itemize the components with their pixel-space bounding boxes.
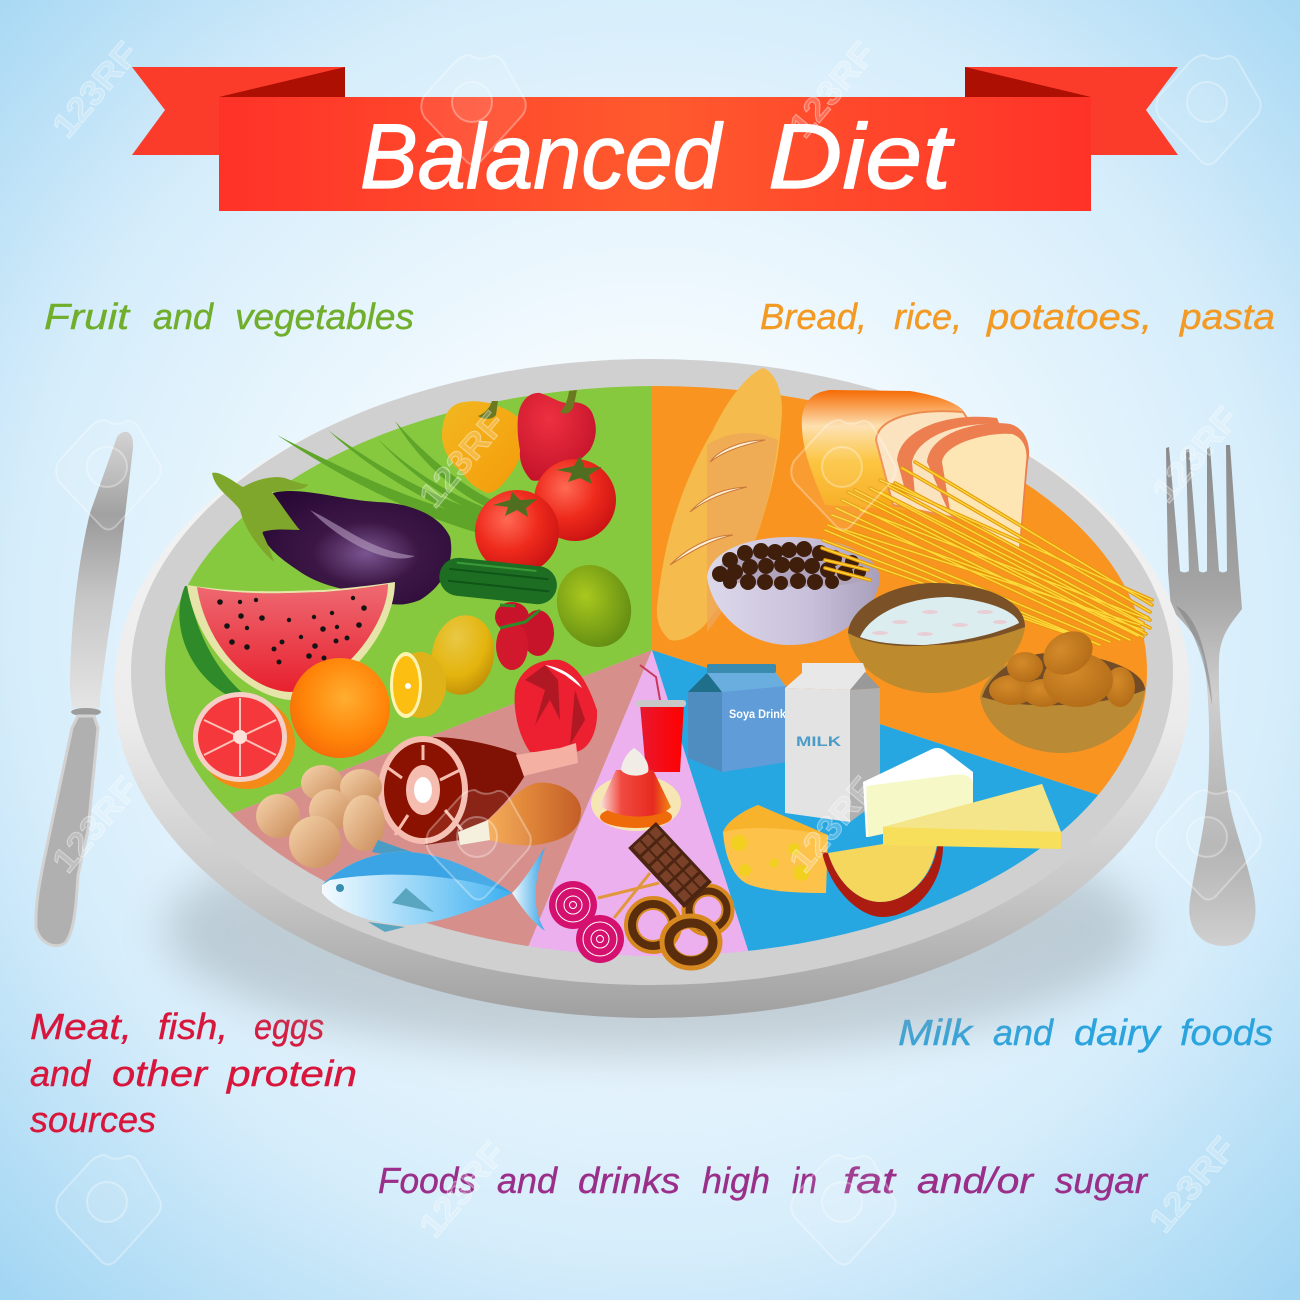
loaf	[802, 390, 963, 510]
title ribbon	[132, 67, 1178, 211]
donut front	[667, 921, 715, 963]
plate rim	[114, 360, 1190, 1018]
label: fats and sugar: sugar	[1055, 1160, 1149, 1201]
label: bread, rice, potatoes, pasta: pasta	[1179, 296, 1275, 337]
grapefruit	[193, 692, 295, 789]
label: meat, fish, eggs: fish,	[158, 1006, 228, 1047]
yellow pepper	[442, 401, 525, 493]
eggs	[256, 765, 385, 868]
peppercorns	[712, 541, 866, 590]
rice bowl	[848, 583, 1025, 693]
yellow cheese	[883, 784, 1061, 849]
milk carton	[785, 663, 880, 822]
label: meat, fish, eggs: Meat,	[30, 1006, 132, 1047]
plate	[114, 359, 1190, 1055]
lemon	[426, 610, 500, 700]
segment: sugar and fat	[528, 650, 748, 956]
cucumber	[437, 556, 559, 606]
food: vegetables and fruit	[179, 390, 644, 789]
title: Diet	[768, 106, 955, 208]
dessert	[591, 748, 681, 831]
food: protein	[256, 660, 597, 932]
label: fats and sugar: and	[497, 1160, 558, 1201]
cheese wheel slice	[822, 835, 943, 917]
orange	[290, 658, 390, 758]
title	[360, 106, 955, 208]
tomato	[475, 490, 559, 574]
label: fruit and vegetables: and	[153, 296, 214, 337]
label: meat, fish, eggs	[30, 1006, 357, 1140]
label: milk and dairy: Milk	[898, 1012, 974, 1053]
icon: knife	[36, 432, 133, 946]
label: fats and sugar: in	[792, 1160, 817, 1201]
food: sugary foods	[549, 665, 728, 963]
label: bread, rice, potatoes, pasta: rice,	[894, 296, 962, 337]
label: milk and dairy	[898, 1012, 1273, 1053]
soya carton	[688, 664, 787, 772]
watermarks: 123RF	[45, 770, 146, 880]
label: fruit and vegetables	[44, 296, 414, 337]
drink cup	[636, 665, 686, 772]
donut back	[688, 890, 728, 930]
label: bread, rice, potatoes, pasta: potatoes,	[986, 296, 1152, 337]
watermarks: 123RF	[1145, 400, 1246, 510]
milk carton: MILK	[796, 733, 841, 749]
label: fats and sugar: Foods	[378, 1160, 476, 1201]
segment: fruit and vegetables	[165, 386, 652, 814]
ham	[378, 736, 578, 845]
label: fruit and vegetables: vegetables	[235, 296, 414, 337]
label: bread, rice, potatoes, pasta: Bread,	[760, 296, 867, 337]
food: dairy	[688, 663, 1061, 917]
baguette	[657, 368, 782, 640]
spring onion	[277, 421, 492, 532]
fish	[322, 840, 545, 932]
plate segments	[165, 386, 1147, 956]
watermarks: 123RF	[412, 405, 513, 515]
ribbon right tail	[965, 67, 1178, 155]
food: starches	[657, 368, 1152, 753]
eggplant stem	[212, 473, 308, 562]
label: fats and sugar: high	[702, 1160, 770, 1201]
cereal bowl	[707, 537, 880, 645]
segment: protein	[231, 650, 652, 946]
label: meat, fish, eggs: and	[30, 1053, 91, 1094]
label: meat, fish, eggs: protein	[226, 1053, 357, 1094]
title: Balanced	[360, 106, 724, 208]
butter	[863, 748, 973, 837]
label: milk and dairy: and	[993, 1012, 1054, 1053]
label: bread, rice, potatoes, pasta	[760, 296, 1275, 337]
label: milk and dairy: foods	[1180, 1012, 1273, 1053]
label: fats and sugar: drinks	[578, 1160, 680, 1201]
watermarks: 123RF	[412, 1135, 513, 1245]
plate well	[131, 359, 1173, 985]
lollipop sticks	[598, 873, 659, 918]
spaghetti	[822, 462, 1152, 645]
holey cheese	[723, 805, 828, 893]
segment: starch	[652, 386, 1147, 795]
label: meat, fish, eggs: sources	[30, 1099, 156, 1140]
strawberries	[495, 602, 554, 670]
icon: fork	[1166, 445, 1256, 946]
watermarks: 123RF	[782, 35, 883, 145]
chocolate bar	[628, 822, 712, 908]
watermarks: 123RF	[782, 770, 883, 880]
label: fats and sugar	[378, 1160, 1149, 1201]
ribbon left tail	[132, 67, 345, 155]
watermelon	[179, 582, 395, 700]
raw meat	[515, 660, 597, 752]
bread slices	[876, 411, 1029, 548]
ribbon left fold	[219, 67, 345, 97]
red pepper	[518, 390, 596, 481]
lollipops	[549, 881, 624, 963]
segment: dairy	[652, 650, 1098, 951]
tomato	[534, 456, 616, 541]
ribbon banner	[219, 97, 1091, 211]
donut left	[631, 903, 675, 947]
label: milk and dairy: dairy	[1074, 1012, 1162, 1053]
chicken leg	[458, 783, 581, 845]
label: fats and sugar: fat	[843, 1160, 898, 1201]
plate shadow	[165, 805, 1145, 1055]
label: meat, fish, eggs: eggs	[254, 1006, 324, 1047]
label: meat, fish, eggs: other	[112, 1053, 209, 1094]
lime	[544, 553, 644, 659]
lemon half	[390, 652, 446, 718]
soya carton: Soya Drink	[729, 707, 786, 721]
potatoes bowl	[980, 623, 1145, 753]
label: fats and sugar: and/or	[917, 1160, 1035, 1201]
label: fruit and vegetables: Fruit	[44, 296, 131, 337]
watermarks: 123RF	[1142, 1130, 1243, 1240]
watermarks: 123RF	[45, 35, 146, 145]
eggplant	[212, 473, 451, 605]
ribbon right fold	[965, 67, 1091, 97]
